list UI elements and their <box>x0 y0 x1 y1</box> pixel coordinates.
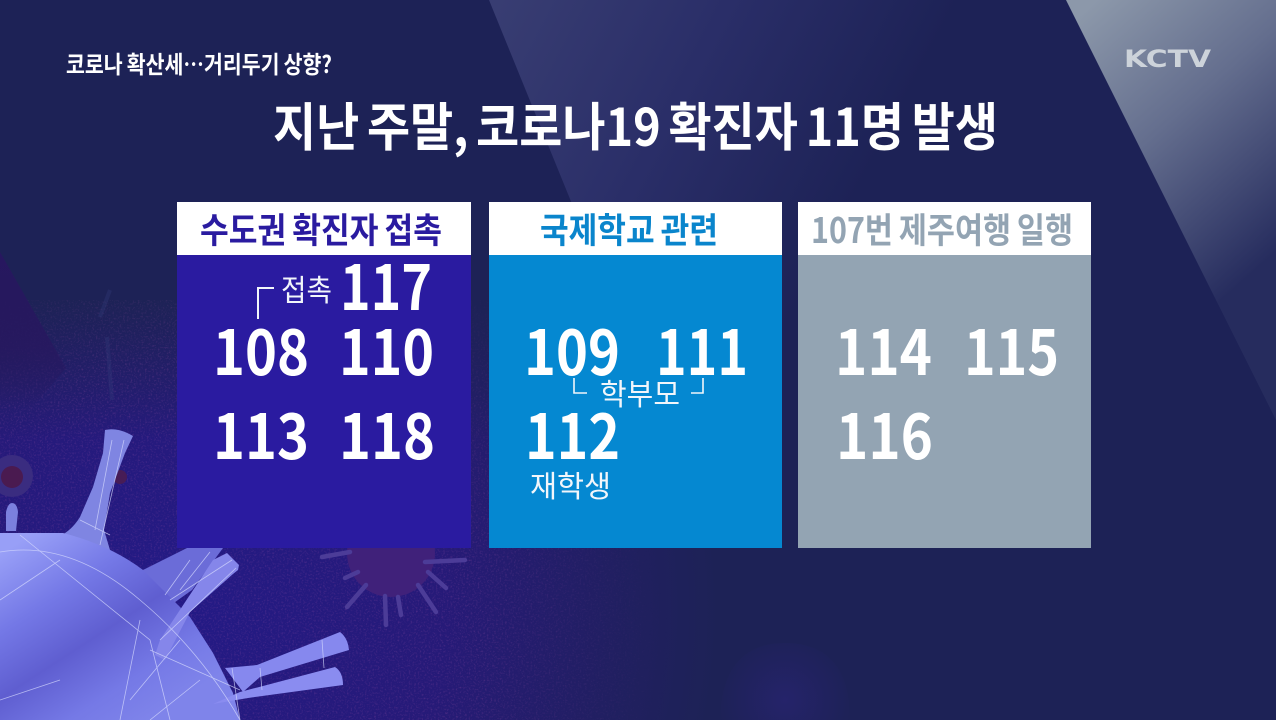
panel header <box>177 202 471 255</box>
panel heading: 국제학교 관련 <box>540 203 718 254</box>
label: 재학생: 재학생 <box>530 462 611 506</box>
panel body <box>489 255 782 548</box>
bracket: left <box>574 378 587 393</box>
spike: small left <box>6 503 18 531</box>
icon: large coronavirus <box>0 429 349 720</box>
body <box>0 533 240 720</box>
spike: lower right upper <box>225 632 349 692</box>
bracket: contact link <box>258 288 274 319</box>
panel heading: 107번 제주여행 일행 <box>811 203 1073 254</box>
case 117: 117 <box>340 238 432 328</box>
case 110: 110 <box>339 303 434 393</box>
label: 접촉: 접촉 <box>281 266 332 310</box>
label: 학부모: 학부모 <box>600 370 680 414</box>
panel heading: 수도권 확진자 접촉 <box>200 203 442 254</box>
panel body <box>798 255 1091 548</box>
panel header <box>489 202 782 255</box>
subtitle: 코로나 확산세…거리두기 상향? <box>66 45 332 80</box>
spike: narrow right <box>155 553 239 660</box>
case 118: 118 <box>339 387 435 477</box>
panel: 국제학교 관련 <box>489 202 782 548</box>
spike: lower right lower <box>213 667 343 704</box>
bracket: right <box>691 378 703 393</box>
wireframe <box>0 440 324 720</box>
case 114: 114 <box>835 303 932 393</box>
spike: wide behind panel <box>143 548 223 625</box>
case 115: 115 <box>964 303 1059 393</box>
icon: small background virus right <box>322 509 465 625</box>
spike: top <box>60 429 143 570</box>
panel header <box>798 202 1091 255</box>
panel: 수도권 확진자 접촉 <box>177 202 471 548</box>
panel: 107번 제주여행 일행 <box>798 202 1091 548</box>
case 111: 111 <box>656 303 748 393</box>
panel body <box>177 255 471 548</box>
case 109: 109 <box>524 303 620 393</box>
background: centre lighter diagonal band <box>489 0 1060 420</box>
background: top right grey wedge <box>1066 0 1276 420</box>
case 113: 113 <box>213 387 309 477</box>
case 116: 116 <box>836 387 933 477</box>
background: purple virus field <box>0 252 850 720</box>
case 108: 108 <box>213 303 309 393</box>
title: 지난 주말, 코로나19 확진자 11명 발생 <box>273 86 998 161</box>
logo: KCTV: KCTV <box>1124 45 1212 73</box>
icon: small background virus left <box>0 455 127 497</box>
case 112: 112 <box>525 387 620 477</box>
